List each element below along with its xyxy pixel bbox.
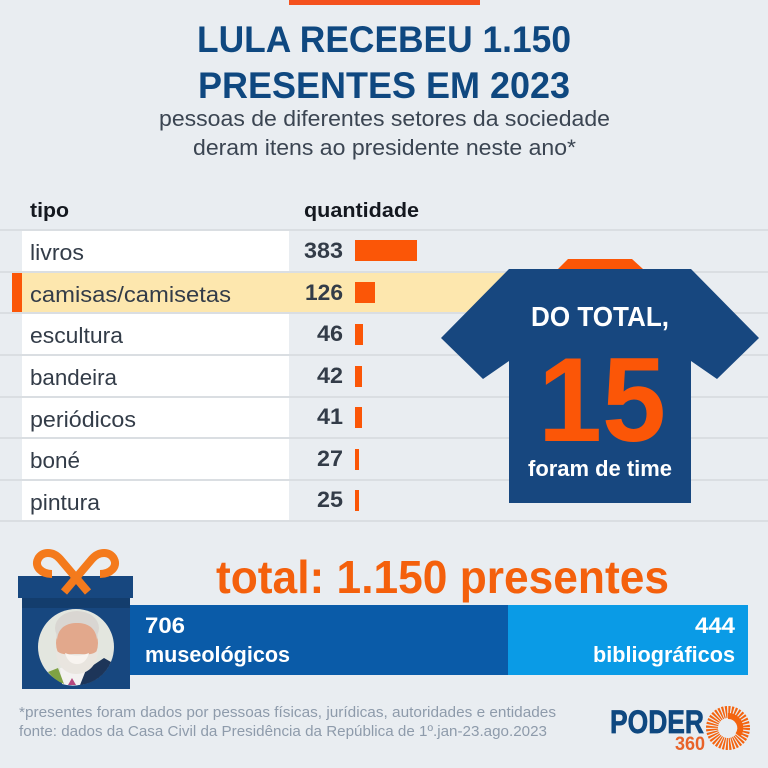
footnote and source (19, 704, 556, 740)
logo sun icon (712, 712, 744, 744)
title (197, 19, 571, 106)
white label column (22, 230, 289, 521)
subtitle: pessoas de diferentes setores da sociedade (159, 106, 610, 131)
label: 444 bibliográficos: 444 (695, 613, 736, 638)
row labels: camisas/camisetas (30, 282, 231, 307)
logo wordmark: PODER (610, 704, 704, 740)
row values: 25 (317, 487, 343, 512)
footnote and source: *presentes foram dados por pessoas físicas, jurídicas, autoridades e entidades (19, 704, 556, 721)
row values (304, 238, 343, 512)
row labels (30, 240, 231, 515)
icon: football shirt callout (441, 259, 759, 503)
shirt collar (558, 259, 643, 269)
icon: gift box with portrait (18, 553, 133, 689)
title: LULA RECEBEU 1.150 (197, 19, 571, 60)
row values: 27 (317, 446, 343, 471)
footnote and source: fonte: dados da Casa Civil da Presidência da República de 1º.jan-23.ago.2023 (19, 723, 547, 740)
title: PRESENTES EM 2023 (198, 65, 570, 106)
stacked bar: museological vs bibliographic (130, 605, 748, 675)
segment: museológicos (130, 605, 508, 675)
logo number: 360 (675, 734, 705, 755)
callout number: 15 (538, 333, 666, 467)
callout lead text: DO TOTAL, (531, 301, 669, 332)
logo: Poder360 (610, 704, 744, 755)
top accent bar (289, 0, 480, 5)
subtitle (159, 106, 610, 160)
row labels: bandeira (30, 365, 118, 390)
row values: 42 (317, 363, 343, 388)
table of gift types (0, 200, 768, 521)
table header: quantidade (304, 200, 419, 222)
callout closing text: foram de time (528, 456, 672, 481)
row labels: escultura (30, 323, 124, 348)
row values: 46 (317, 321, 343, 346)
label: 444 bibliográficos: bibliográficos (593, 642, 735, 667)
total heading: total: 1.150 presentes (216, 551, 669, 603)
highlighted row (22, 272, 512, 313)
bar chart (355, 240, 417, 511)
row labels: boné (30, 448, 80, 473)
row values: 126 (305, 280, 343, 305)
highlight marker (12, 272, 22, 313)
segment: bibliográficos (508, 605, 748, 675)
shirt body (441, 269, 759, 503)
label: 706 museológicos (145, 613, 290, 667)
row labels: periódicos (30, 407, 136, 432)
label: 706 museológicos: museológicos (145, 642, 290, 667)
row values: 41 (317, 404, 343, 429)
label: 444 bibliográficos (593, 613, 736, 667)
row values: 383 (304, 238, 343, 263)
label: 706 museológicos: 706 (145, 613, 185, 638)
subtitle: deram itens ao presidente neste ano* (193, 135, 576, 160)
gift box body (22, 598, 130, 689)
row labels: livros (30, 240, 84, 265)
portrait photo (38, 609, 114, 686)
gift ribbon (37, 553, 115, 592)
row labels: pintura (30, 490, 101, 515)
table header: tipo (30, 200, 69, 222)
gift box lid (18, 576, 133, 598)
table header (30, 200, 419, 222)
